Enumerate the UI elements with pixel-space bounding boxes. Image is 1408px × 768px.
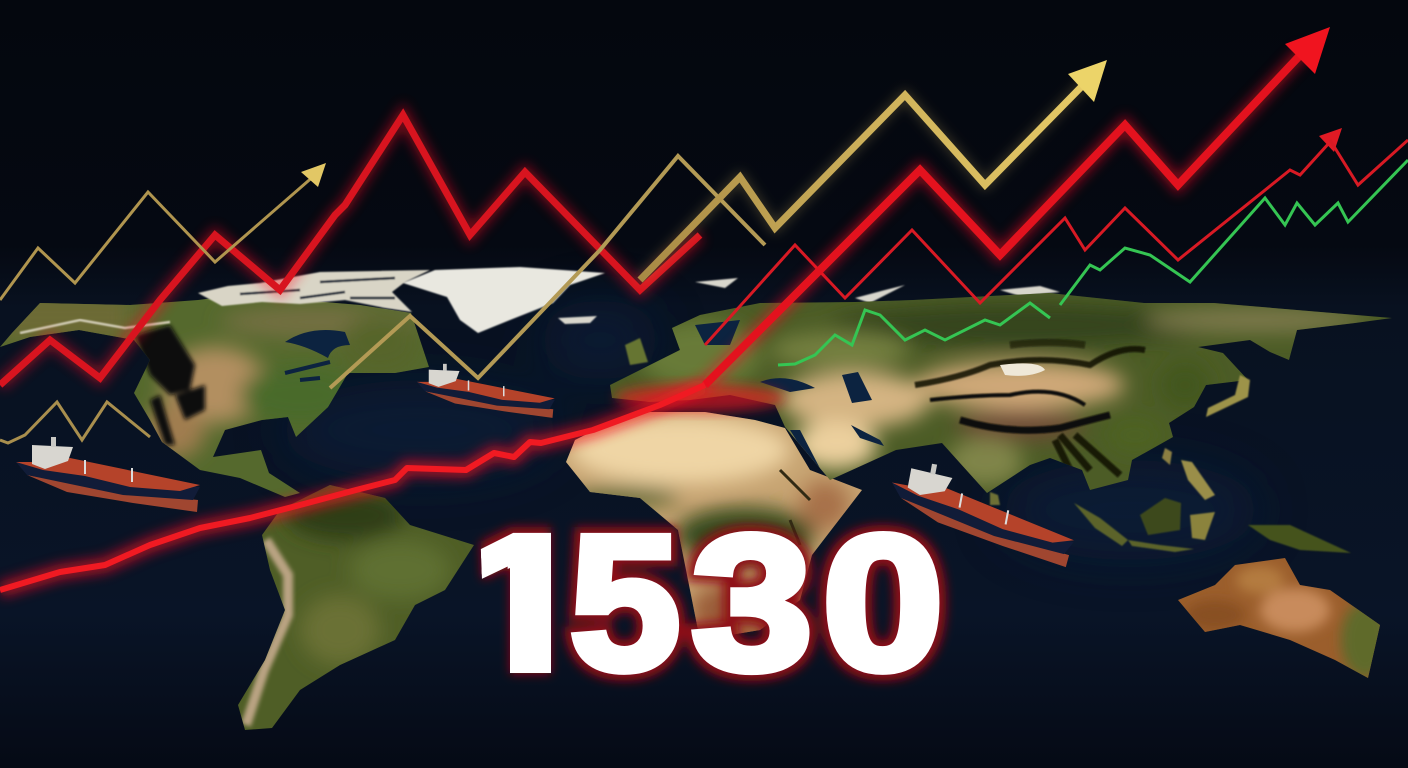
chart: green lines <box>778 160 1408 365</box>
continent: Australia <box>1178 558 1380 678</box>
line: gold main with arrow <box>640 60 1107 280</box>
continent: South America <box>230 480 480 735</box>
chart: main red arrow right <box>705 27 1330 385</box>
chart: jagged low red trend line <box>0 385 705 590</box>
inland seas <box>695 320 884 478</box>
ice: small floes <box>558 278 1060 324</box>
ocean highlights near coasts <box>280 300 1260 560</box>
number glow: 5 <box>569 496 681 710</box>
line: gold small lower left <box>0 402 150 443</box>
world map <box>0 267 1400 735</box>
continent: Southeast Asia islands <box>990 375 1351 553</box>
line: gold left with arrow <box>0 163 326 300</box>
chart: gold lines <box>0 60 1107 443</box>
continent: British Isles <box>625 338 648 365</box>
chart: thin red line with arrow <box>705 128 1408 345</box>
number white digits <box>480 531 940 676</box>
ship: right tanker <box>882 457 1083 568</box>
headline number: 1530 <box>474 518 954 688</box>
number white digits: 1 <box>455 496 593 710</box>
continent: Africa <box>566 412 862 634</box>
number glow: 0 <box>822 496 944 710</box>
ice: Canadian Arctic <box>198 270 430 312</box>
number glow <box>474 518 954 688</box>
glow: red highlight over Mediterranean <box>615 384 785 412</box>
ship: left tanker <box>16 437 200 512</box>
continent: North America <box>0 298 429 497</box>
number glow: 1 <box>455 496 593 710</box>
ice: Arctic channels <box>240 278 395 298</box>
ice: Greenland <box>403 267 605 333</box>
number white digits: 3 <box>691 496 813 710</box>
number white digits: 0 <box>822 496 944 710</box>
continent: Europe and Asia <box>600 285 1400 500</box>
line: gold middle <box>330 156 765 388</box>
chart: main rising red line, left <box>0 115 700 385</box>
continent: Greenland and Arctic ice <box>198 267 1060 333</box>
number white digits: 5 <box>569 496 681 710</box>
number glow: 3 <box>691 496 813 710</box>
ship: centre tanker <box>417 364 555 418</box>
